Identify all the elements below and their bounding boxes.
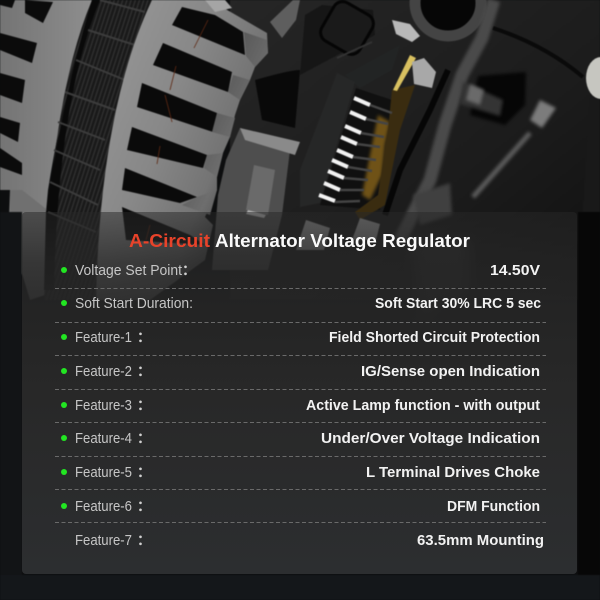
side and base shading xyxy=(578,212,600,575)
row: feature 2: IG/Sense open Indication xyxy=(361,363,540,380)
row: voltage set point: 14.50V xyxy=(490,262,540,279)
row: feature 5: Feature-5 xyxy=(75,464,132,481)
row: feature 3: ： xyxy=(137,397,151,413)
row: feature 5: L Terminal Drives Choke xyxy=(366,464,540,481)
end housing plate xyxy=(212,70,300,270)
row: feature 1 xyxy=(61,329,540,346)
row: feature 6: ： xyxy=(137,498,151,514)
row: feature 3: Active Lamp function - with output xyxy=(306,397,540,414)
row: feature 7 xyxy=(75,532,544,549)
row: feature 3: Feature-3 xyxy=(75,397,132,414)
stator fins xyxy=(44,0,152,300)
row: feature 5 xyxy=(61,464,540,481)
row: feature 6: Feature-6 xyxy=(75,498,132,515)
row: feature 5: ： xyxy=(137,464,151,480)
title: Alternator Voltage Regulator xyxy=(215,231,470,251)
row: feature 1: Field Shorted Circuit Protection xyxy=(329,329,540,346)
row: feature 3 xyxy=(61,397,540,414)
row: feature 2 xyxy=(61,363,540,380)
row: soft start duration: Soft Start Duration: xyxy=(75,295,193,312)
row: feature 7: Feature-7 xyxy=(75,532,132,549)
left cover band xyxy=(0,0,92,300)
row dividers xyxy=(55,288,546,522)
title: A-Circuit xyxy=(129,231,210,251)
bolts and gold terminal xyxy=(296,20,436,250)
row: feature 4 xyxy=(61,430,540,447)
row: feature 6: DFM Function xyxy=(447,498,540,515)
row: feature 4: ： xyxy=(137,430,151,446)
row: feature 1: ： xyxy=(137,329,151,345)
row: feature 4: Under/Over Voltage Indication xyxy=(321,430,540,447)
regulator body and pins xyxy=(300,45,415,220)
row: soft start duration: Soft Start 30% LRC 5 sec xyxy=(375,295,541,312)
row: soft start duration xyxy=(61,295,541,312)
row: feature 6 xyxy=(61,498,540,515)
row: voltage set point: Voltage Set Point xyxy=(75,262,183,279)
row: feature 4: Feature-4 xyxy=(75,430,132,447)
panel: specification card xyxy=(22,212,577,574)
row: feature 7: 63.5mm Mounting xyxy=(417,532,544,549)
row: feature 2: Feature-2 xyxy=(75,363,132,380)
row: feature 1: Feature-1 xyxy=(75,329,132,346)
casting ring and right bracket xyxy=(385,0,600,300)
connector plug xyxy=(300,0,377,75)
row: feature 2: ： xyxy=(137,363,151,379)
row: voltage set point xyxy=(61,262,540,279)
right cage with arms xyxy=(96,0,300,300)
row: feature 7: ： xyxy=(137,532,151,548)
row: voltage set point: ： xyxy=(182,262,196,278)
